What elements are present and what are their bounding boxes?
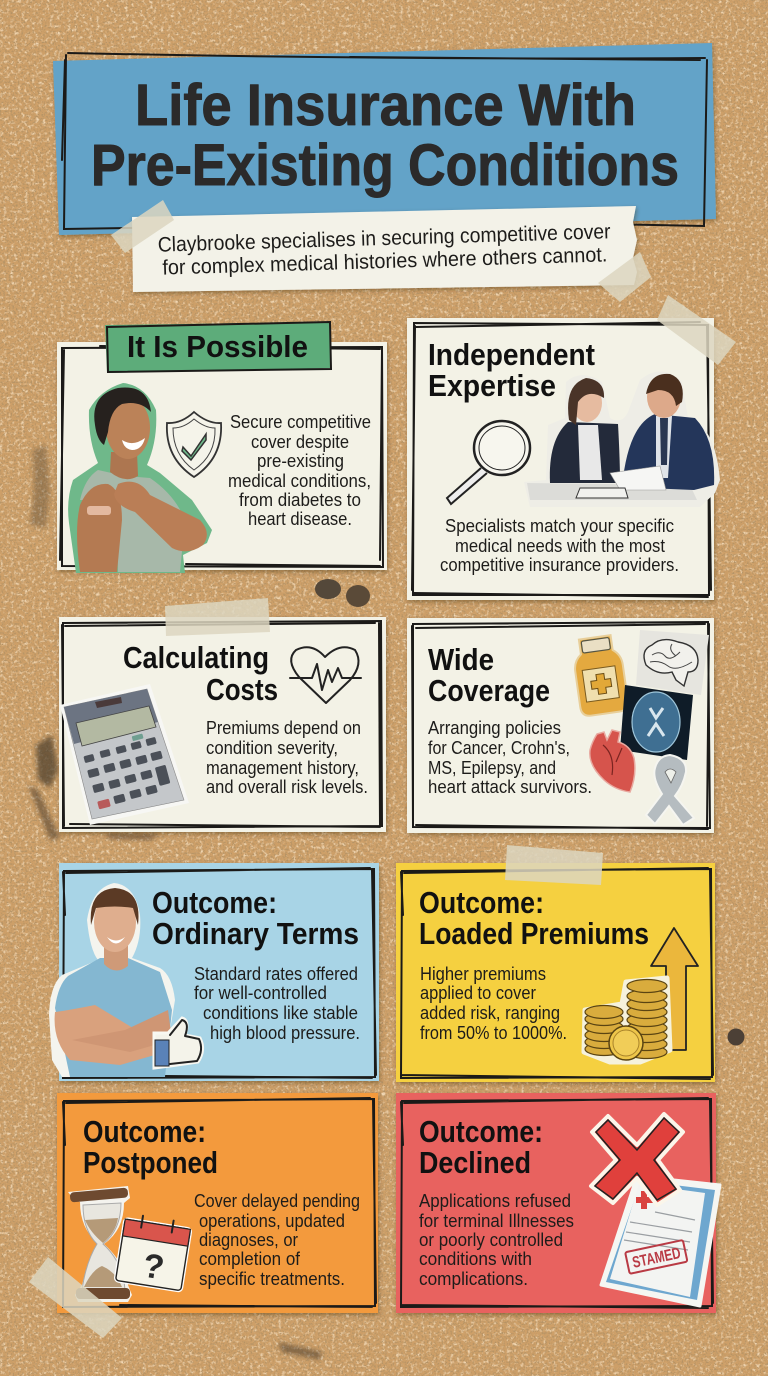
heading: wide coverage <box>428 642 550 708</box>
title text: Pre-Existing Conditions <box>91 133 679 198</box>
text: declined: complications. <box>419 1269 528 1289</box>
text: postponed: completion of <box>199 1249 301 1269</box>
icon: red cross <box>591 1114 683 1205</box>
heading: wide coverage: Coverage <box>428 673 550 708</box>
tape: above calculating costs <box>165 598 270 636</box>
heading: postponed: Postponed <box>83 1145 218 1180</box>
panel: outcome declined <box>396 1093 720 1313</box>
panel: outcome loaded premiums <box>396 863 715 1082</box>
heading: calculating costs: Costs <box>206 672 278 707</box>
text: declined: for terminal Illnesses <box>419 1211 574 1231</box>
title banner <box>53 43 716 235</box>
heading tag: it is possible: It Is Possible <box>127 329 308 364</box>
tape: above loaded premiums <box>505 845 603 885</box>
icon: thumbs up <box>154 1018 203 1068</box>
text: calculating costs <box>206 718 368 797</box>
heading: loaded premiums <box>419 885 649 951</box>
text: it is possible: from diabetes to <box>239 490 361 510</box>
tape: subtitle right <box>598 252 651 302</box>
icon: brain scan <box>620 685 693 760</box>
text: loaded premiums: from 50% to 1000%. <box>420 1023 567 1043</box>
heading: calculating costs: Calculating <box>123 640 269 675</box>
text: ordinary terms: high blood pressure. <box>210 1023 360 1043</box>
tape: top right of expertise panel <box>657 295 736 365</box>
text: ordinary terms <box>194 964 360 1043</box>
icon: clipboard with stamp: STAMED <box>631 1245 682 1272</box>
photo: smiling person with plaster <box>68 383 212 573</box>
text: ordinary terms: for well-controlled <box>194 983 327 1003</box>
text: independent expertise: medical needs with the most <box>455 536 665 556</box>
icon: clipboard with stamp <box>601 1176 720 1306</box>
subtitle note: for complex medical histories where others cannot. <box>162 243 608 280</box>
text: declined: conditions with <box>419 1249 532 1269</box>
text: declined <box>419 1191 574 1289</box>
text: independent expertise: competitive insurance providers. <box>440 555 679 575</box>
panel: wide coverage <box>407 618 714 833</box>
text: loaded premiums: added risk, ranging <box>420 1003 560 1023</box>
title text <box>91 73 679 198</box>
text: independent expertise: Specialists match your specific <box>445 516 674 536</box>
icon: calendar with question mark: ? <box>140 1247 167 1287</box>
text: wide coverage: heart attack survivors. <box>428 777 592 797</box>
text: declined: or poorly controlled <box>419 1230 563 1250</box>
text: wide coverage: Arranging policies <box>428 718 561 738</box>
heading: independent expertise: Independent <box>428 337 595 372</box>
text: it is possible: Secure competitive <box>230 412 371 432</box>
heading: declined <box>419 1114 543 1180</box>
panel: outcome ordinary terms <box>49 863 379 1081</box>
panel: calculating costs <box>59 617 386 832</box>
icon: anatomical heart <box>590 730 635 792</box>
heading: ordinary terms <box>152 885 359 951</box>
text: declined: Applications refused <box>419 1191 571 1211</box>
tape: bottom left corner <box>29 1257 122 1338</box>
text: calculating costs: management history, <box>206 758 359 778</box>
text: loaded premiums <box>420 964 567 1043</box>
icon: calendar with question mark <box>116 1213 191 1291</box>
text: postponed: diagnoses, or <box>199 1230 298 1250</box>
heading: ordinary terms: Outcome: <box>152 885 277 920</box>
heading: wide coverage: Wide <box>428 642 494 677</box>
text: wide coverage: MS, Epilepsy, and <box>428 758 556 778</box>
icon: heart with pulse <box>290 647 361 703</box>
heading: declined: Declined <box>419 1145 531 1180</box>
text: calculating costs: and overall risk levels. <box>206 777 368 797</box>
heading: postponed <box>83 1114 218 1180</box>
subtitle note <box>132 206 637 292</box>
text: it is possible <box>228 412 371 529</box>
icon: shield with check <box>167 412 221 477</box>
heading: calculating costs <box>123 640 278 707</box>
icon: arrow and coin stacks <box>584 928 698 1062</box>
panel: independent expertise <box>407 318 720 600</box>
text: independent expertise <box>440 516 679 575</box>
text: ordinary terms: conditions like stable <box>203 1003 358 1023</box>
text: loaded premiums: Higher premiums <box>420 964 546 984</box>
icon: calculator <box>60 684 189 825</box>
heading: postponed: Outcome: <box>83 1114 206 1149</box>
text: it is possible: cover despite <box>251 432 349 452</box>
text: postponed: specific treatments. <box>199 1269 345 1289</box>
icon: brain sketch <box>636 630 709 695</box>
subtitle note: Claybrooke specialises in securing competitive cover <box>157 220 611 257</box>
icon: awareness ribbon <box>646 755 694 825</box>
heading tag: it is possible <box>105 322 331 373</box>
text: ordinary terms: Standard rates offered <box>194 964 358 984</box>
heading: independent expertise: Expertise <box>428 368 556 403</box>
text: postponed: Cover delayed pending <box>194 1191 360 1211</box>
heading: loaded premiums: Outcome: <box>419 885 544 920</box>
text: wide coverage <box>428 718 592 797</box>
tape: subtitle left <box>111 200 174 253</box>
text: postponed: operations, updated <box>199 1211 345 1231</box>
panel: it is possible <box>57 322 387 573</box>
text: it is possible: medical conditions, <box>228 471 371 491</box>
heading: ordinary terms: Ordinary Terms <box>152 916 359 951</box>
heading: independent expertise <box>428 337 595 403</box>
text: it is possible: heart disease. <box>248 509 352 529</box>
stains on the cork <box>28 445 744 1360</box>
text: calculating costs: Premiums depend on <box>206 718 361 738</box>
text: postponed <box>194 1191 360 1289</box>
photo: man with crossed arms and thumbs up <box>49 883 175 1077</box>
icon: hourglass <box>68 1186 132 1302</box>
photo: two advisers at a desk <box>524 371 720 507</box>
text: wide coverage: for Cancer, Crohn's, <box>428 738 570 758</box>
panel: outcome postponed <box>57 1093 378 1313</box>
icon: magnifying glass <box>447 421 530 504</box>
text: loaded premiums: applied to cover <box>420 983 536 1003</box>
icon: pill bottle <box>571 634 629 717</box>
text: calculating costs: condition severity, <box>206 738 338 758</box>
title text: Life Insurance With <box>135 73 636 138</box>
heading: declined: Outcome: <box>419 1114 543 1149</box>
heading: loaded premiums: Loaded Premiums <box>419 916 649 951</box>
text: it is possible: pre-existing <box>257 451 344 471</box>
